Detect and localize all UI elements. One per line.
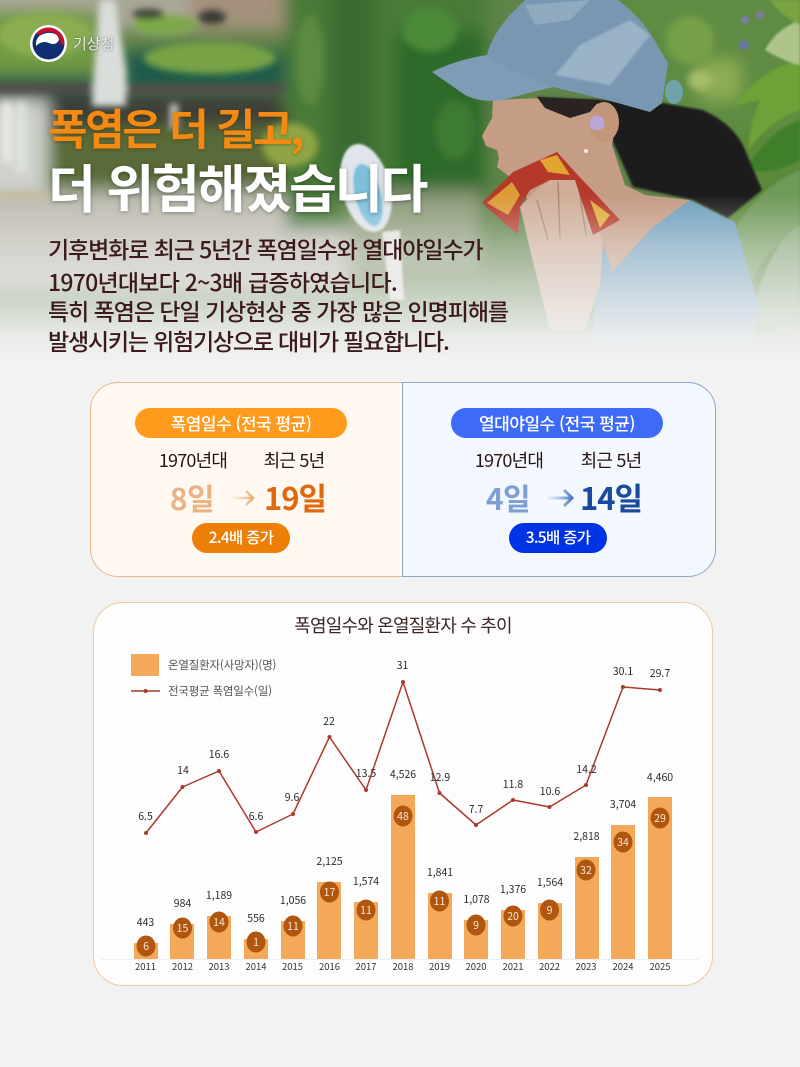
increase badge [192, 523, 290, 553]
line value labels: 11.8 [503, 777, 523, 792]
year labels: 2024 [612, 959, 634, 973]
year labels: 2012 [172, 959, 193, 973]
death count labels: 34 [617, 835, 629, 850]
title line 2: 더 위험해졌습니다 [48, 148, 426, 223]
emblem [30, 25, 67, 62]
hair over the temple [537, 97, 600, 118]
heading pill: 열대야일수 (전국 평균) [479, 410, 635, 435]
line value labels: 9.6 [285, 790, 299, 805]
legend: 온열질환자(사망자)(명) [168, 657, 276, 673]
line value labels: 22 [323, 714, 335, 729]
arrow [548, 489, 574, 507]
value: 14 days: 14일 [580, 474, 642, 519]
label: 1970s: 1970년대 [159, 447, 227, 473]
year labels: 2022 [539, 959, 560, 973]
chart title: 폭염일수와 온열질환자 수 추이 [294, 612, 512, 638]
heading pill [135, 408, 347, 438]
label: 1970s: 1970년대 [475, 447, 543, 473]
bar value labels: 4,526 [390, 767, 416, 782]
year labels: 2014 [245, 959, 267, 973]
increase badge [509, 523, 607, 553]
year labels: 2025 [649, 959, 671, 973]
title [48, 96, 429, 223]
intro paragraph: 특히 폭염은 단일 기상현상 중 가장 많은 인명피해를 [48, 293, 508, 327]
bar value labels: 2,125 [316, 854, 343, 869]
bars [134, 795, 672, 959]
hero photo: woman cooling herself with a fan in summer park [0, 0, 800, 340]
panel: heatwave and tropical night day counts [90, 382, 716, 577]
year labels: 2021 [502, 959, 524, 973]
value: 4 days: 4일 [486, 475, 530, 519]
bar value labels: 1,056 [280, 893, 306, 908]
line value labels: 10.6 [540, 784, 560, 799]
line value labels: 31 [397, 658, 408, 673]
line value labels: 16.6 [209, 747, 229, 762]
ear and earbud [584, 102, 619, 153]
line value labels: 14.2 [576, 762, 597, 777]
increase badge: 2.4배 증가 [209, 526, 273, 548]
intro paragraph: 발생시키는 위험기상으로 대비가 필요합니다. [48, 323, 449, 357]
death count labels: 14 [213, 915, 225, 930]
neck and face [482, 98, 690, 272]
line series: heatwave days [144, 680, 662, 835]
death count labels: 11 [287, 919, 299, 934]
panel: chart card [93, 602, 713, 986]
bar value labels: 556 [247, 911, 265, 926]
line value labels: 6.6 [249, 809, 263, 824]
line value labels: 12.9 [430, 770, 450, 785]
cap [432, 0, 683, 112]
death count labels: 9 [547, 903, 553, 918]
background: blurred park scenery [0, 0, 800, 380]
bar value labels: 1,376 [500, 882, 526, 897]
bar value labels: 1,841 [427, 865, 453, 880]
death count labels: 17 [324, 885, 335, 900]
logo: government emblem and agency name [30, 25, 114, 62]
shirt [590, 200, 760, 380]
bar value labels: 3,704 [610, 797, 636, 812]
bar value labels: 984 [174, 896, 191, 911]
death count labels [143, 809, 666, 954]
year labels: 2020 [465, 959, 487, 973]
death count labels: 1 [253, 935, 259, 950]
year labels: 2017 [355, 959, 377, 973]
line value labels: 30.1 [613, 664, 633, 679]
bar value labels: 1,078 [463, 892, 490, 907]
line value labels: 14 [177, 763, 189, 778]
line value labels: 7.7 [469, 802, 483, 817]
legend: 전국평균 폭염일수(일) [168, 683, 272, 699]
death count labels: 9 [473, 918, 479, 933]
year labels: 2015 [282, 959, 303, 973]
death count labels: 11 [434, 894, 445, 909]
death count labels: 6 [143, 939, 149, 954]
death count labels: 15 [177, 921, 188, 936]
value: 19 days: 19일 [264, 474, 326, 519]
label: recent 5 years: 최근 5년 [581, 447, 641, 473]
bar value labels: 443 [137, 915, 154, 930]
line value labels: 29.7 [650, 666, 670, 681]
year labels: 2013 [208, 959, 230, 973]
bar value labels: 1,574 [353, 874, 379, 889]
heading pill: 폭염일수 (전국 평균) [171, 410, 311, 435]
value: 8 days: 8일 [170, 475, 214, 519]
year labels: 2011 [135, 959, 156, 973]
label: recent 5 years: 최근 5년 [264, 447, 324, 473]
death count labels: 32 [580, 863, 592, 878]
bar value labels [137, 767, 673, 930]
bar value labels: 1,564 [537, 875, 563, 890]
death count labels: 48 [397, 809, 409, 824]
plants on the right [725, 0, 800, 340]
woman figure [332, 0, 762, 380]
patterned cloth [482, 152, 620, 235]
bar value labels: 4,460 [647, 770, 673, 785]
bar value labels: 2,818 [573, 829, 600, 844]
year labels [135, 959, 671, 973]
year labels: 2019 [429, 959, 450, 973]
death count badges [136, 806, 670, 956]
line value labels: 6.5 [138, 809, 153, 824]
panel: tropical night days [402, 382, 716, 577]
death count labels: 11 [360, 903, 372, 918]
legend [131, 654, 276, 699]
year labels: 2018 [392, 959, 414, 973]
year labels: 2023 [575, 959, 597, 973]
agency name: 기상청 [73, 33, 114, 54]
death count labels: 29 [654, 811, 666, 826]
fade to background [0, 195, 800, 380]
line value labels: 13.5 [356, 766, 376, 781]
intro paragraph: 기후변화로 최근 5년간 폭염일수와 열대야일수가 [48, 231, 483, 265]
panel: heatwave days [90, 382, 403, 577]
death count labels: 20 [507, 909, 519, 924]
line value labels [138, 658, 670, 824]
intro paragraph [48, 231, 508, 357]
hair [537, 97, 762, 218]
bar value labels: 1,189 [206, 888, 232, 903]
increase badge: 3.5배 증가 [526, 526, 590, 548]
chart: heatwave days and heat illness patients 2011-2025 [101, 612, 699, 973]
hand holding cloth [520, 178, 603, 330]
handheld fan [332, 139, 404, 300]
year labels: 2016 [319, 959, 340, 973]
title line 1: 폭염은 더 길고, [48, 96, 302, 158]
intro paragraph: 1970년대보다 2~3배 급증하였습니다. [48, 264, 397, 298]
arrow [233, 490, 255, 506]
axis [101, 958, 699, 960]
heading pill [451, 408, 663, 438]
